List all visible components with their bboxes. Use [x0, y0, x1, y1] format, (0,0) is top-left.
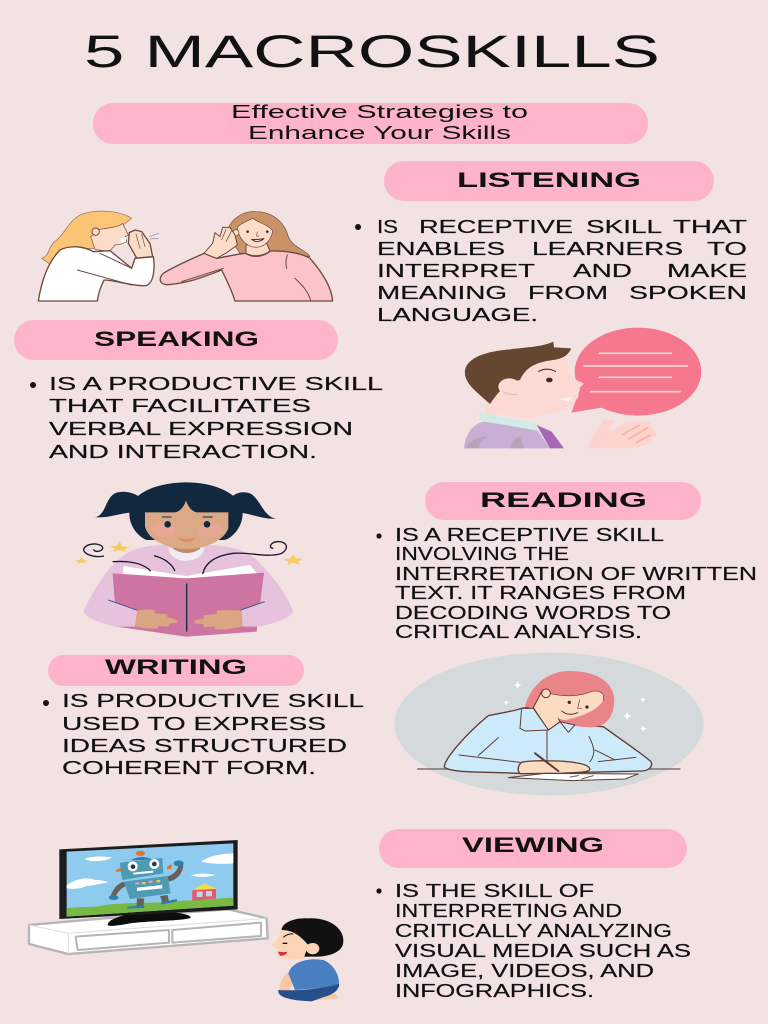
text block: listening: ENABLES	[377, 239, 505, 259]
heading: speaking	[14, 320, 338, 360]
text block: reading: INVOLVING THE	[395, 544, 569, 564]
icon: man talking with speech bubble	[464, 328, 701, 448]
text block: reading: INTERRETATION OF WRITTEN	[395, 564, 757, 584]
text block: speaking: VERBAL EXPRESSION	[49, 419, 353, 439]
icon: girl reading a book	[75, 482, 303, 637]
heading: listening: LISTENING	[457, 169, 641, 192]
text block: viewing: INTERPRETING AND	[395, 901, 622, 921]
text block: listening: MEANING	[377, 283, 507, 303]
text block: speaking: IS A PRODUCTIVE SKILL	[49, 374, 383, 394]
text block: listening: THAT	[673, 217, 747, 237]
text block: viewing	[376, 881, 691, 1001]
heading: reading: READING	[480, 489, 647, 512]
subtitle banner: Effective Strategies to	[231, 102, 528, 122]
title: 5 MACROSKILLS	[84, 26, 660, 77]
icon: child watching a robot on television	[29, 840, 343, 1001]
text block: listening: INTERPRET	[377, 261, 535, 281]
heading: speaking: SPEAKING	[94, 328, 259, 351]
text block: listening	[355, 217, 747, 325]
text block: viewing: IMAGE, VIDEOS, AND	[395, 961, 654, 981]
text block: writing: IS PRODUCTIVE SKILL	[62, 691, 364, 711]
text block: listening: AND	[573, 261, 632, 281]
heading: viewing: VIEWING	[462, 834, 604, 857]
text block: listening: SPOKEN	[629, 283, 747, 303]
text block: viewing: IS THE SKILL OF	[395, 881, 594, 901]
text block: speaking	[30, 374, 383, 462]
text block: writing	[43, 691, 364, 778]
text block: listening: IS	[377, 217, 398, 237]
text block: speaking: THAT FACILITATES	[49, 396, 311, 416]
text block: listening: RECEPTIVE	[419, 217, 573, 237]
heading: listening	[384, 161, 714, 201]
heading: reading	[425, 482, 701, 520]
text block: reading	[376, 525, 757, 642]
text block: speaking: AND INTERACTION.	[49, 442, 317, 462]
icon: woman writing at a desk	[394, 653, 704, 795]
heading: writing	[48, 655, 304, 686]
text block: listening: LEARNERS	[532, 239, 683, 259]
text block: reading: TEXT. IT RANGES FROM	[395, 583, 686, 603]
text block: reading: IS A RECEPTIVE SKILL	[395, 525, 664, 545]
text block: listening: SKILL	[586, 217, 662, 237]
heading: writing: WRITING	[105, 656, 247, 679]
text block: listening: TO	[707, 239, 747, 259]
text block: reading: DECODING WORDS TO	[395, 603, 671, 623]
text block: viewing: INFOGRAPHICS.	[395, 981, 594, 1001]
icon: two women whispering and listening	[38, 211, 333, 301]
subtitle banner: Enhance Your Skills	[248, 123, 511, 143]
text block: viewing: CRITICALLY ANALYZING	[395, 921, 672, 941]
subtitle banner	[93, 102, 648, 144]
text block: writing: IDEAS STRUCTURED	[62, 736, 347, 756]
text block: listening: FROM	[528, 283, 608, 303]
text block: listening: MAKE	[667, 261, 747, 281]
text block: reading: CRITICAL ANALYSIS.	[395, 622, 642, 642]
heading: viewing	[379, 829, 687, 868]
text block: viewing: VISUAL MEDIA SUCH AS	[395, 941, 691, 961]
text block: listening: LANGUAGE.	[377, 305, 538, 325]
text block: writing: COHERENT FORM.	[62, 758, 316, 778]
text block: writing: USED TO EXPRESS	[62, 714, 326, 734]
